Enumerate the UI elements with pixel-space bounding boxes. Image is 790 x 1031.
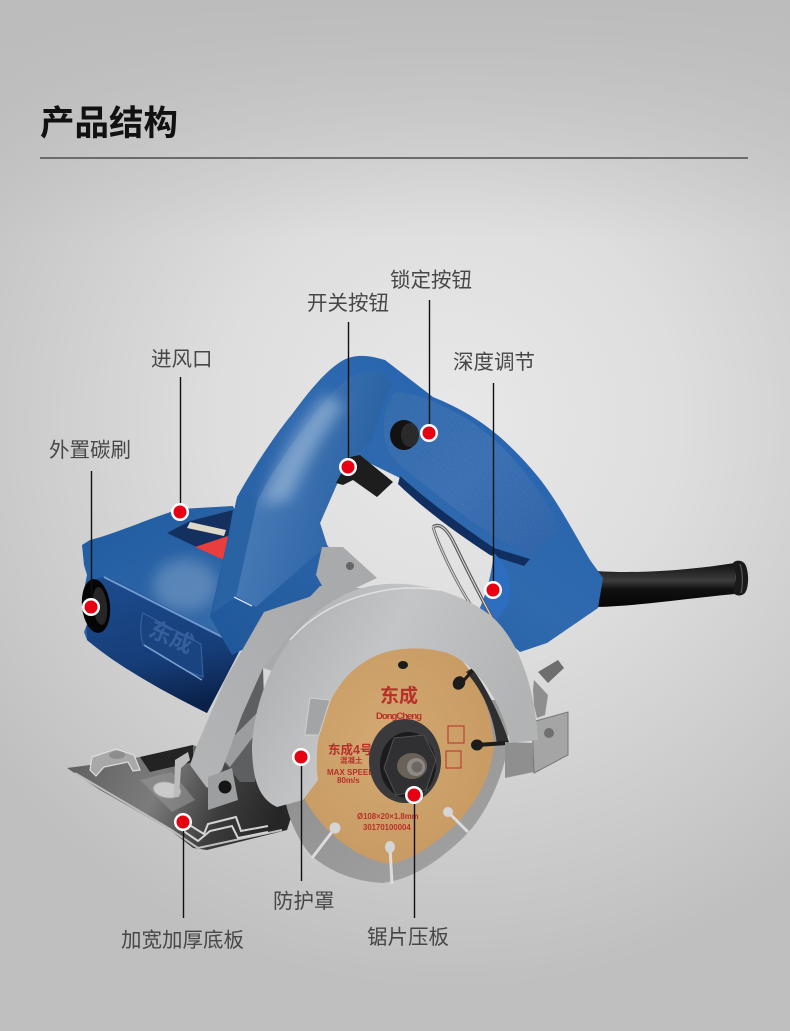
blade print: DongCheng bbox=[376, 711, 422, 722]
callout: 锯片压板 bbox=[367, 786, 449, 949]
blade print: 80m/s bbox=[337, 776, 360, 785]
callout: 锁定按钮: 锁定按钮 bbox=[390, 269, 472, 292]
callout: 开关按钮: 开关按钮 bbox=[307, 292, 389, 315]
rear clip bbox=[90, 749, 140, 776]
callout: 深度调节: 深度调节 bbox=[453, 351, 535, 374]
blade print: 混凝土 bbox=[340, 755, 363, 765]
blade print bbox=[327, 684, 464, 832]
callout: 开关按钮 bbox=[307, 292, 389, 476]
callout: 进风口: 进风口 bbox=[151, 348, 212, 371]
product: marble cutter bbox=[67, 356, 748, 884]
embossed brand plate bbox=[141, 613, 203, 680]
embossed brand plate: 东成 bbox=[145, 616, 198, 658]
flange and nut bbox=[369, 719, 441, 803]
title: 产品结构 bbox=[40, 105, 178, 143]
base plate bbox=[67, 745, 300, 850]
motor housing bbox=[79, 506, 248, 720]
depth adjust wire bbox=[433, 526, 497, 627]
carbon brush cap bbox=[79, 578, 113, 634]
rear blade bracket and wing nut bbox=[505, 660, 568, 778]
callout: 深度调节 bbox=[453, 351, 535, 599]
callout: 进风口 bbox=[151, 348, 212, 521]
callout: 锯片压板: 锯片压板 bbox=[367, 926, 449, 949]
blade print: 30170100004 bbox=[363, 823, 411, 832]
rating label bbox=[167, 510, 233, 560]
callout: 外置碳刷: 外置碳刷 bbox=[49, 439, 131, 462]
blade print: MAX SPEED bbox=[327, 768, 374, 777]
pivot bracket bbox=[174, 752, 238, 810]
blade guard bbox=[252, 584, 538, 807]
blade slots bbox=[312, 812, 468, 884]
callout: 外置碳刷 bbox=[49, 439, 131, 616]
blade print: 东成 bbox=[380, 684, 418, 707]
guard wing and hinge bbox=[174, 547, 400, 810]
handle arch bbox=[210, 356, 603, 655]
power cord bbox=[596, 561, 748, 607]
callout: 防护罩 bbox=[273, 748, 334, 913]
textured grip bbox=[384, 392, 560, 556]
trigger switch bbox=[336, 455, 393, 497]
lock button bbox=[390, 420, 419, 450]
callout: 防护罩: 防护罩 bbox=[273, 890, 334, 913]
blade print: Ø108×20×1.8mm bbox=[357, 812, 419, 821]
saw blade bbox=[283, 641, 510, 884]
front clip bbox=[176, 817, 268, 841]
callout: 锁定按钮 bbox=[390, 269, 472, 442]
callout: 加宽加厚底板 bbox=[121, 813, 244, 952]
callout: 加宽加厚底板: 加宽加厚底板 bbox=[121, 929, 244, 952]
depth adjust recess bbox=[480, 553, 510, 624]
blade print: 东成4号 bbox=[328, 742, 372, 757]
